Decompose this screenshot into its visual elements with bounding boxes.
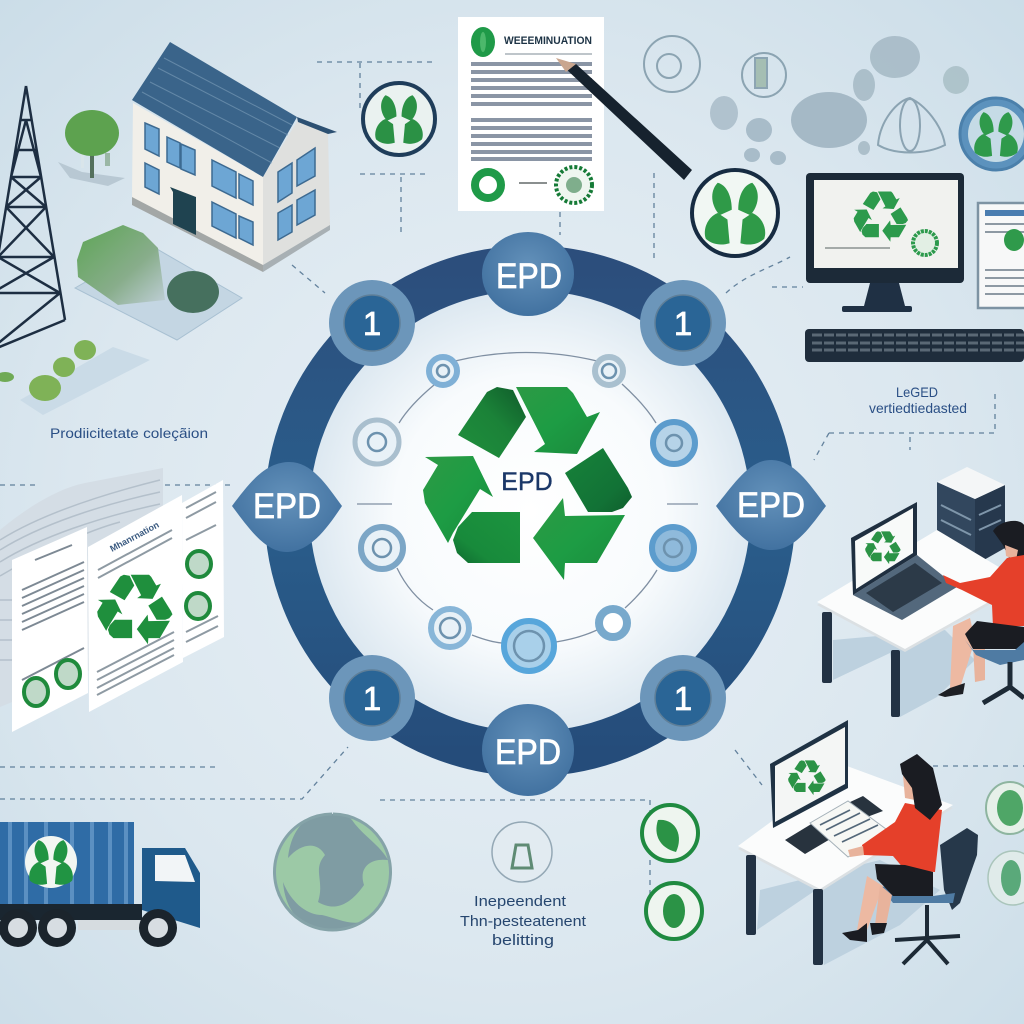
icon: house xyxy=(132,42,337,272)
node: EPD left: EPD xyxy=(253,487,321,526)
node: EPD top: EPD xyxy=(496,257,562,296)
logo label: EPD xyxy=(501,468,553,496)
node: 1 bottom left: 1 xyxy=(363,680,381,717)
laptop xyxy=(853,555,957,620)
server xyxy=(937,467,1005,565)
node: EPD bottom: EPD xyxy=(495,733,561,772)
icon: landscape plate xyxy=(0,225,242,415)
woman xyxy=(993,521,1024,578)
node: 1 top right: 1 xyxy=(674,305,692,342)
icon: faded audit badge xyxy=(492,822,552,882)
document title: WEEEMINUATION xyxy=(504,35,592,47)
monitor xyxy=(770,720,848,828)
panel: third-party auditing caption xyxy=(460,822,587,949)
center glow xyxy=(304,285,756,737)
icon: small badge top xyxy=(363,83,435,155)
panel: stacked reports left xyxy=(0,468,224,732)
caption: product data collection: Prodiicitetate coleçãion xyxy=(50,425,208,441)
caption: verification: vertiedtiedasted xyxy=(869,400,967,416)
node: 1 top left xyxy=(329,280,415,366)
node: EPD right xyxy=(716,460,826,550)
panel: desktop monitor xyxy=(805,173,1024,362)
node: EPD bottom xyxy=(482,704,574,796)
node: 1 top right xyxy=(640,280,726,366)
icons far right lower xyxy=(986,782,1024,905)
report: side xyxy=(182,480,224,658)
report: back xyxy=(12,527,88,732)
ring nodes xyxy=(232,232,826,796)
icon: pen xyxy=(556,58,692,180)
shadow xyxy=(757,860,940,965)
icon: transmission tower xyxy=(0,86,65,350)
keyboard and paper xyxy=(785,823,832,854)
panel: stacked reports left: Mhanrnation xyxy=(108,520,161,554)
central recycling logo xyxy=(423,387,632,580)
woman xyxy=(903,775,915,800)
icon: green seal upper xyxy=(642,805,698,861)
node: 1 bottom right: 1 xyxy=(674,680,692,717)
icon: badge far right xyxy=(960,98,1024,170)
node: 1 bottom right xyxy=(640,655,726,741)
panel: building xyxy=(0,42,337,415)
node: EPD left xyxy=(232,462,342,552)
panel: woman at desktop desk xyxy=(738,720,978,965)
panel: truck xyxy=(0,822,200,947)
side document xyxy=(978,203,1024,308)
icon: recycling badge xyxy=(692,170,778,256)
caption: verification: LeGED xyxy=(896,384,938,400)
shadow xyxy=(833,630,975,717)
icon: green seal lower xyxy=(646,883,702,939)
ring xyxy=(287,268,773,754)
caption text xyxy=(460,893,587,949)
keyboard xyxy=(805,329,1024,362)
faded icon cluster top right xyxy=(644,36,969,165)
node: 1 bottom left xyxy=(329,655,415,741)
chair xyxy=(940,828,978,910)
node: 1 top left: 1 xyxy=(363,305,381,342)
caption text: belitting xyxy=(492,932,554,949)
caption text: Thn-pesteatenent xyxy=(460,913,587,930)
inner thin ring with small icons xyxy=(355,352,698,671)
report: front xyxy=(88,495,183,712)
node: EPD right: EPD xyxy=(737,486,805,525)
icon: tree xyxy=(58,110,125,186)
caption text: Inepeendent xyxy=(474,893,567,910)
node: EPD top xyxy=(482,232,574,316)
panel: verification document xyxy=(458,17,692,211)
desk xyxy=(817,533,1024,652)
caption: verification xyxy=(869,384,967,416)
panel: woman at laptop desk xyxy=(817,467,1024,717)
desk xyxy=(738,769,953,892)
icon: globe xyxy=(274,814,391,930)
